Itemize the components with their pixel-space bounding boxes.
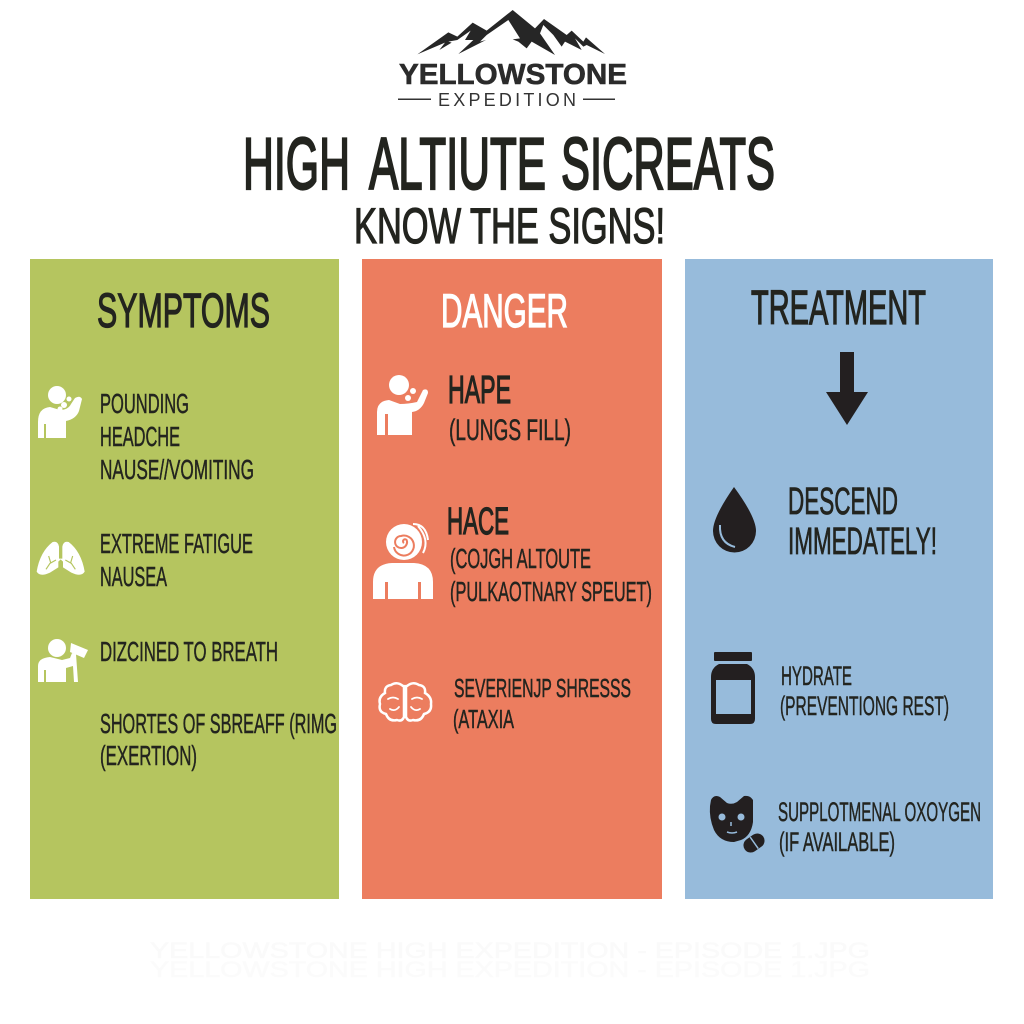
text: shortness of breath [100,708,337,771]
text: extreme fatigue, nausea [100,528,253,592]
text: shortness of breath: (EXERTION) [100,740,197,771]
icon: mask and pill [710,796,768,856]
logo: Yellowstone Expedition [398,10,627,110]
text: descend immediately: DESCEND [788,481,898,523]
text: dizziness: DIZCINED TO BREATH [100,636,278,667]
footer: faint caption: YELLOWSTONE HIGH EXPEDITION - EPISODE 1.JPG [150,957,870,982]
panel: symptoms [30,259,339,899]
icon: water drop [713,487,756,552]
icon: person with spiral head [373,524,433,599]
text: extreme fatigue, nausea: EXTREME FATIGUE [100,528,253,559]
title: HIGH [243,124,350,205]
arrow: descend [826,352,868,425]
text: pounding headache, nausea [100,388,254,485]
icon: lungs [37,542,85,575]
text: pounding headache, nausea: POUNDING [100,388,189,419]
text: severe stress, ataxia: (ATAXIA [453,704,514,734]
text: HAPE [448,369,571,447]
icon: person coughing [377,375,428,435]
subtitle: KNOW THE SIGNS! [354,198,665,254]
panel: danger [362,259,662,899]
text: supplemental oxygen [778,797,981,857]
title: ALTIUTE [369,124,546,205]
text: hydrate: HYDRATE [781,661,852,691]
title: SICREATS [561,124,775,205]
icon: brain [380,683,431,721]
icon: mountain range [417,10,605,55]
text: severe stress, ataxia [453,673,631,734]
footer: faint caption [150,938,870,982]
logo subtitle: EXPEDITION [438,90,576,110]
text: descend immediately [788,481,937,563]
icon: person with hammer [38,639,88,682]
text: pounding headache, nausea: NAUSE//VOMITING [100,454,254,485]
title [243,124,775,205]
text: HACE [447,501,652,607]
text: shortness of breath: SHORTES OF SBREAFF (RIMG [100,708,337,739]
icon: person with throat pain [38,386,82,438]
text: HACE: (COJGH ALTOUTE [450,543,591,574]
text: HACE: (PULKAOTNARY SPEUET) [450,576,652,607]
footer: faint caption: YELLOWSTONE HIGH EXPEDITION - EPISODE 1.JPG [150,938,870,963]
icon: jar [711,652,755,724]
text: HACE: HACE [447,501,509,543]
panel: treatment [685,259,993,899]
heading: danger: DANGER [441,284,568,337]
text: HAPE: (LUNGS FILL) [449,414,571,447]
heading: symptoms: SYMPTOMS [97,285,270,338]
text: pounding headache, nausea: HEADCHE [100,421,180,452]
logo wordmark: YELLOWSTONE [399,59,627,91]
text: severe stress, ataxia: SEVERIENJP SHRESSS [454,673,631,703]
text: hydrate [780,661,949,721]
text: HAPE: HAPE [448,369,511,412]
text: supplemental oxygen: (IF AVAILABLE) [779,827,895,857]
text: extreme fatigue, nausea: NAUSEA [100,561,167,592]
